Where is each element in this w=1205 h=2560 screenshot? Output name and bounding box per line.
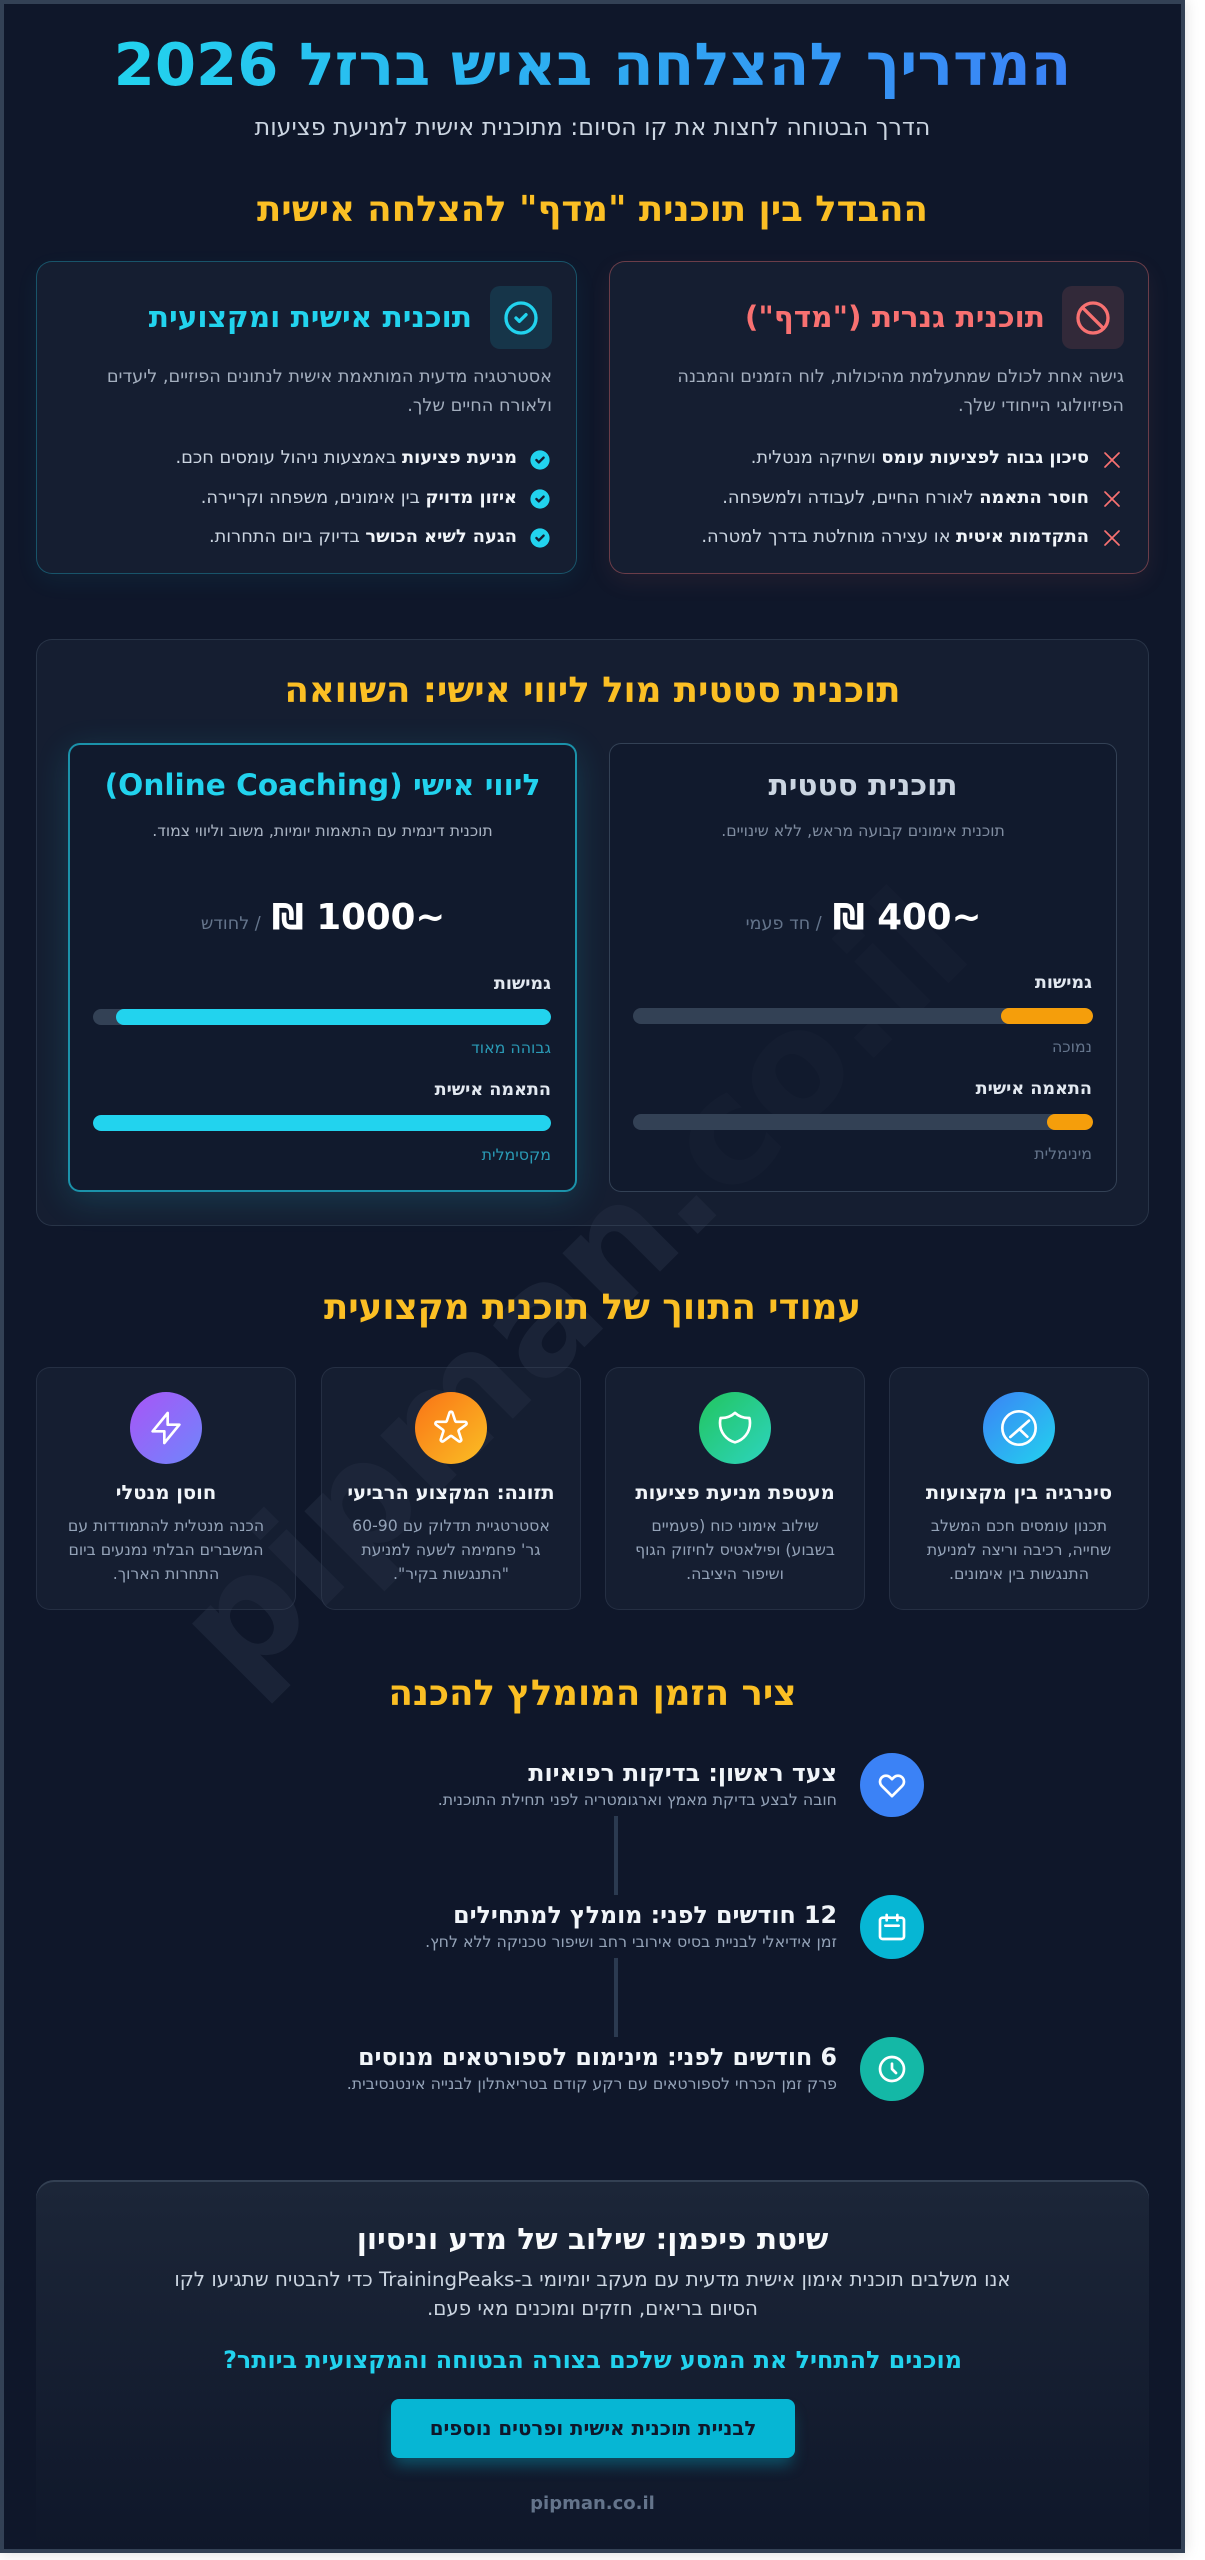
list item 1: מניעת פציעות באמצעות ניהול עומסים חכם. [175,447,517,468]
panel: static vs coaching comparison [36,639,1149,1226]
pillar text: בשבוע) ופילאטיס לחיזוק הגוף [635,1540,835,1559]
icon: check 3 [530,528,550,548]
text: pipman.co.il [144,858,1001,1716]
step title: צעד ראשון: בדיקות רפואיות [528,1759,837,1787]
icon: ban [1062,286,1124,349]
icon: star [415,1392,487,1464]
list item 3: התקדמות איטית או עצירה מוחלטת בדרך למטרה. [701,526,1089,547]
personalization label: התאמה אישית [435,1080,551,1100]
pillar text [352,1516,550,1583]
timeline connector 1 [614,1816,618,1895]
title: המדריך להצלחה באיש ברזל 2026 [114,30,1071,99]
panel: pillar nutrition [321,1367,581,1610]
icon: check 2 [530,489,550,509]
card heading: תוכנית אישית ומקצועית [149,300,472,334]
pillar text: גר' פחמימה לשעה למניעת [361,1540,541,1559]
icon: x 3 [1104,530,1120,546]
pillar title: חוסן מנטלי [116,1481,216,1504]
flexibility label: גמישות [494,974,551,994]
subtitle: הדרך הבטוחה לחצות את קו הסיום: מתוכנית אישית למניעת פציעות [255,113,930,141]
pillar text [68,1516,264,1583]
pillar text: תכנון עומסים חכם המשלב [931,1516,1107,1535]
icon: x 1 [1104,452,1120,468]
flexibility bar [93,1009,551,1025]
panel: pillar mental [36,1367,296,1610]
comparison heading: תוכנית סטטית מול ליווי אישי: השוואה [284,670,901,711]
static price: / חד פעמי [746,914,822,934]
card: static plan [609,743,1117,1192]
list item 2: איזון מדויק בין אימונים, משפחה וקריירה. [201,487,517,508]
icon: check circle [490,286,552,349]
method text: אנו משלבים תוכנית אימון אישית מדעית עם מעקב יומיומי ב-TrainingPeaks כדי להבטיח שתגיעו לקו [174,2268,1011,2291]
list item 3: הגעה לשיא הכושר בדיוק ביום התחרות. [209,526,517,547]
list item 2: חוסר התאמה לאורח החיים, לעבודה ולמשפחה. [722,487,1089,508]
heading: plan difference: ההבדל בין תוכנית "מדף" להצלחה אישית [257,189,928,230]
step title: 6 חודשים לפני: מינימום לספורטאים מנוסים [358,2043,837,2071]
card description: גישה אחת לכולם שמתעלמת מהיכולות, לוח הזמנים והמבנה [677,367,1124,387]
method text [174,2268,1011,2320]
step text: זמן אידיאלי לבניית בסיס אירובי רחב ושיפור טכניקה ללא לחץ. [425,1932,837,1951]
method title: שיטת פיפמן: שילוב של מדע וניסיון [357,2222,828,2256]
panel: pillar synergy [889,1367,1149,1610]
pillar text: הכנה מנטלית להתמודדות עם [68,1516,264,1535]
pillar text: התנגשות בין אימונים. [949,1564,1089,1583]
step title: 12 חודשים לפני: מומלץ למתחילים [453,1901,837,1929]
flexibility bar [633,1008,1093,1024]
coaching description: תוכנית דינמית עם התאמות יומיות, משוב וליווי צמוד. [152,821,493,840]
button [391,2399,795,2458]
icon: heart [860,1753,924,1817]
coaching price: / לחודש [201,914,261,934]
method text: הסיום בריאים, חזקים ומוכנים מאי פעם. [427,2297,758,2320]
timeline connector 2 [614,1958,618,2037]
personalization value: מקסימלית [482,1145,551,1164]
icon: calendar [860,1895,924,1959]
pillar text: ושיפור היציבה. [686,1564,784,1583]
card description [107,367,552,416]
card description [677,367,1124,416]
card description: הפיזיולוגי הייחודי שלך. [958,396,1124,416]
icon: shield [699,1392,771,1464]
coaching title: ליווי אישי (Online Coaching) [105,768,540,802]
pillar text [635,1516,835,1583]
step text: חובה לבצע בדיקת מאמץ וארגומטריה לפני תחילת התוכנית. [438,1790,837,1809]
icon: check 1 [530,450,550,470]
flexibility value: נמוכה [1052,1037,1092,1056]
pillar text: אסטרטגיית תדלוק עם 60-90 [352,1516,550,1535]
timeline step 3 [347,2037,924,2101]
coaching price: ~1000 ₪ [272,897,445,938]
heading: pillars: עמודי התווך של תוכנית מקצועית [324,1287,861,1328]
panel: pillar injury prevention [605,1367,865,1610]
personalization label: התאמה אישית [976,1079,1092,1099]
panel: personal plan [36,261,577,574]
pillar text: שילוב אימוני כוח (פעמיים [651,1516,819,1535]
personalization bar [93,1115,551,1131]
flexibility label: גמישות [1035,973,1092,993]
pillar text: התחרות הארוך. [113,1564,219,1583]
personalization value: מינימלית [1034,1144,1092,1163]
timeline step 1 [438,1753,924,1817]
static price: ~400 ₪ [833,897,981,938]
pillar title: מעטפת מניעת פציעות [635,1481,835,1504]
step text: פרק זמן הכרחי לספורטאים עם רקע קודם בטריאתלון לבנייה אינטנסיבית. [347,2074,837,2093]
card heading: תוכנית גנרית ("מדף") [745,300,1045,334]
personalization bar [633,1114,1093,1130]
pillar text: "התנגשות בקיר". [393,1564,509,1583]
flexibility value: גבוהה מאוד [471,1038,551,1057]
pillar title: סינרגיה בין מקצועות [926,1481,1112,1504]
heading: timeline: ציר הזמן המומלץ להכנה [389,1673,796,1714]
footer site name: pipman.co.il [530,2493,655,2514]
timeline step 2 [425,1895,924,1959]
pillar text: המשברים הבלתי נמנעים ביום [68,1540,264,1559]
card: online coaching [68,743,577,1192]
button: לבניית תוכנית אישית ופרטים נוספים [430,2417,756,2440]
static title: תוכנית סטטית [768,768,958,802]
pillar text [927,1516,1111,1583]
panel: generic plan [609,261,1149,574]
static price [746,897,981,938]
card description: אסטרטגיה מדעית המותאמת אישית לנתונים הפיזיים, ליעדים [107,367,552,387]
call to action question: מוכנים להתחיל את המסע שלכם בצורה הבטוחה והמקצועית ביותר? [223,2346,962,2374]
icon: bolt [130,1392,202,1464]
pillar title: תזונה: המקצוע הרביעי [347,1481,555,1504]
panel: pipman method call to action [36,2180,1149,2549]
pillar text: שחייה, רכיבה וריצה למניעת [927,1540,1111,1559]
icon: x 2 [1104,491,1120,507]
icon: clock [860,2037,924,2101]
card description: ולאורח החיים שלך. [407,396,552,416]
list item 1: סיכון גבוה לפציעות עומס ושחיקה מנטלית. [751,447,1089,468]
icon: synergy [983,1392,1055,1464]
static description: תוכנית אימונים קבועה מראש, ללא שינויים. [721,821,1005,840]
